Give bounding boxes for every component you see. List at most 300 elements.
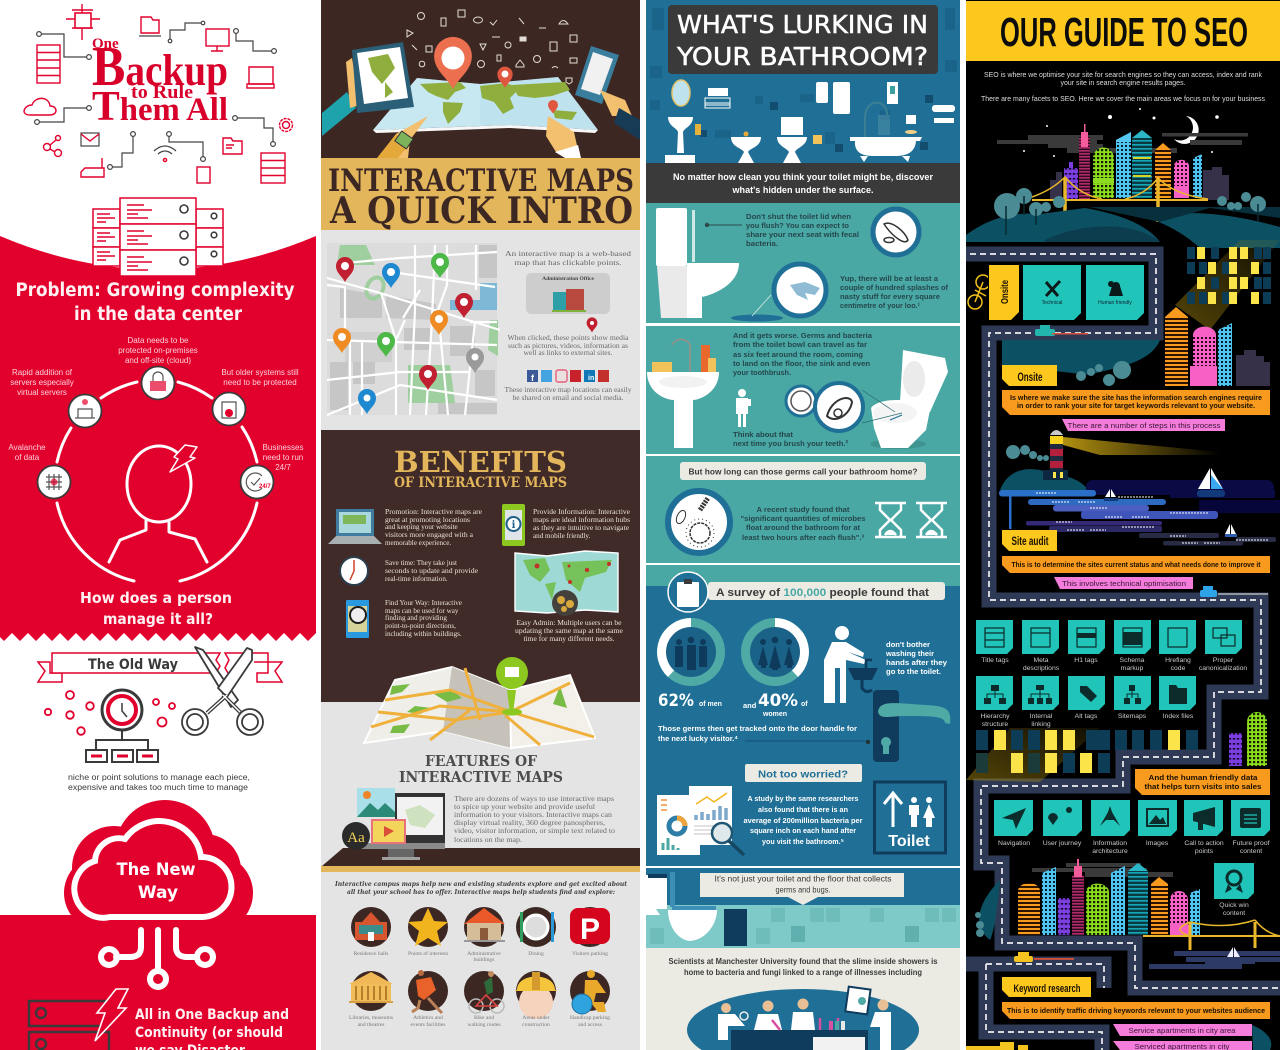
panel: What's lurking in your bathroom bbox=[646, 0, 960, 1050]
illustration: admin world map bbox=[515, 551, 618, 616]
benefits left text: maps can be used for way bbox=[385, 607, 459, 615]
illustration: basin with bottles bbox=[647, 339, 719, 448]
campus icon labels: Points of interests bbox=[408, 950, 448, 957]
benefits right text: maps are ideal information hubs bbox=[533, 516, 630, 524]
ring icons bbox=[38, 366, 274, 498]
researchers text: A study by the same researchers bbox=[748, 794, 858, 803]
label: technical optimisation: This involves technical optimisation bbox=[1062, 579, 1186, 588]
labels: human friendly: architecture bbox=[1092, 848, 1128, 855]
bar: keyword description: This is to identify traffic driving keywords relevant to your websites audience bbox=[1007, 1008, 1265, 1015]
study text bbox=[740, 505, 866, 542]
network of device icons bbox=[24, 4, 292, 183]
study text: least two hours after each flush".³ bbox=[742, 533, 864, 542]
icon: door handle bbox=[745, 690, 950, 762]
ring labels: need to be protected bbox=[223, 378, 297, 387]
server stack illustration bbox=[93, 198, 223, 276]
heading: growing complexity: in the data center bbox=[74, 304, 243, 325]
labels: technical row one: code bbox=[1171, 665, 1186, 672]
clicked points text: When clicked, these points show media bbox=[508, 334, 629, 342]
stat: 40% bbox=[743, 691, 808, 718]
hill: bottom right tree bbox=[1252, 1025, 1271, 1050]
campus icon labels: Administrative bbox=[467, 951, 501, 957]
title box: YOUR BATHROOM? bbox=[676, 42, 928, 71]
researchers text: square inch on each hand after bbox=[750, 826, 856, 835]
heading: the new way: Way bbox=[138, 883, 178, 903]
campus icon labels: Libraries, museums bbox=[349, 1015, 393, 1021]
caption: old way bbox=[68, 773, 250, 792]
ring labels: Businesses bbox=[263, 443, 303, 452]
brush teeth text: next time you brush your teeth.² bbox=[733, 439, 848, 448]
icon: person brushing bbox=[736, 389, 751, 427]
heading: features: INTERACTIVE MAPS bbox=[399, 768, 563, 786]
red panel: the new way bbox=[0, 800, 316, 1050]
text: all in one backup bbox=[135, 1007, 289, 1050]
heading: growing complexity bbox=[16, 280, 294, 325]
scientists text: home to bacteria and fungi linked to a range of illnesses including bbox=[684, 968, 922, 977]
researchers text: average of 200million bacteria per bbox=[744, 816, 862, 825]
clicked points text: such as pictures, videos, information as bbox=[508, 342, 628, 350]
popup: administration office bbox=[526, 273, 610, 314]
benefits right text: Provide Information: Interactive bbox=[533, 508, 630, 516]
easy admin text bbox=[515, 619, 623, 643]
germ travel text: to land on the floor, the sink and even bbox=[733, 359, 870, 368]
illustration: monitor and media: Aa bbox=[347, 830, 365, 846]
toilet lid text: share your next seat with fecal bbox=[746, 230, 859, 239]
night windows strip bbox=[966, 728, 1198, 782]
donut: 40% of women bbox=[741, 618, 809, 686]
callout: not just your toilet bbox=[700, 873, 904, 905]
icon: splash circle bbox=[774, 264, 826, 316]
toilet lid text bbox=[746, 212, 859, 248]
researchers text: you visit the bathroom.⁵ bbox=[762, 837, 844, 846]
ring labels: of data bbox=[15, 453, 40, 462]
heading: the new way bbox=[116, 860, 196, 903]
researchers text: also found that there is an bbox=[758, 805, 848, 814]
heading: the new way: The New bbox=[116, 860, 196, 880]
labels: technical row two: linking bbox=[1031, 721, 1051, 728]
sign: toilet: Toilet bbox=[888, 833, 930, 850]
campus icon labels: construction bbox=[522, 1022, 550, 1028]
title box: WHAT'S LURKING IN bbox=[677, 10, 928, 39]
benefits right text: and mobile friendly. bbox=[533, 532, 590, 540]
ribbon: the old way bbox=[38, 653, 282, 682]
labels: human friendly: points bbox=[1195, 848, 1214, 855]
door handle text bbox=[658, 724, 857, 743]
text: all in one backup: Continuity (or should bbox=[135, 1025, 283, 1041]
labels: human friendly: Information bbox=[1093, 840, 1127, 847]
germ travel text bbox=[733, 331, 873, 377]
study text: "significant quantities of microbes bbox=[740, 514, 866, 523]
hands text: hands after they bbox=[886, 658, 948, 667]
campus icon labels: walking routes bbox=[467, 1022, 501, 1028]
text: all in one backup: All in One Backup and bbox=[135, 1007, 289, 1023]
labels: human friendly: content bbox=[1240, 848, 1262, 855]
illustration: sea and sailboats bbox=[999, 468, 1280, 546]
title band: A QUICK INTRO bbox=[329, 190, 633, 232]
bar: onsite description: Is where we make sure the site has the information search engines require bbox=[1010, 395, 1262, 402]
illustration: monitor and media bbox=[342, 788, 445, 860]
benefits left text bbox=[385, 508, 482, 638]
icon: bicycle bbox=[968, 275, 990, 309]
skyline: upper city bbox=[1050, 124, 1229, 200]
ring icons: 24/7 bbox=[259, 484, 271, 490]
popup: administration office: Administration Office bbox=[542, 276, 594, 282]
icon: clock with network and costs bbox=[45, 690, 175, 762]
features text bbox=[454, 795, 615, 844]
ribbon: the old way: The Old Way bbox=[88, 657, 178, 673]
icon: person washing hands bbox=[824, 626, 878, 703]
ring labels: and off-site (cloud) bbox=[125, 356, 191, 365]
share text: These interactive map locations can easily bbox=[504, 386, 632, 394]
illustration: floor with toilet bbox=[646, 868, 960, 948]
icon: bacteria circle bbox=[873, 209, 919, 255]
label: onsite bbox=[1002, 365, 1057, 386]
skyline: onsite buildings and hill bbox=[1002, 307, 1270, 386]
intro text: SEO is where we optimise your site for search engines so they can access, index and rank bbox=[984, 72, 1262, 79]
night sky stars and moon bbox=[997, 108, 1248, 157]
label: technical optimisation bbox=[1054, 577, 1193, 589]
red panel: problem bbox=[0, 236, 316, 641]
labels: technical row two: Alt tags bbox=[1075, 713, 1098, 720]
splashes text: couple of hundred splashes of bbox=[840, 283, 948, 292]
benefits left text: visitors more engaged with a bbox=[385, 531, 474, 539]
illustration: fold-out road map with pin bbox=[364, 657, 595, 748]
illustration: tablets and hands bbox=[322, 42, 640, 158]
ring arcs and person outline bbox=[57, 382, 257, 581]
panel: Interactive Maps bbox=[321, 0, 640, 1050]
labels: technical row one: canonicalization bbox=[1199, 665, 1247, 672]
title: One Backup to Rule Them All bbox=[92, 36, 228, 130]
title: One Backup to Rule Them All: Backup bbox=[92, 36, 228, 98]
callout: not too worried bbox=[745, 764, 862, 782]
ring labels: Rapid addition of bbox=[12, 368, 73, 377]
cards: onsite steps: Technical bbox=[1042, 300, 1062, 306]
labels: human friendly: Navigation bbox=[998, 840, 1030, 847]
bar: human friendly data bbox=[1135, 769, 1270, 795]
icon: yellow truck bbox=[966, 1042, 1028, 1050]
campus intro text: all that your school has to offer. Interactive maps help students find and explore: bbox=[347, 888, 616, 896]
caption: old way: expensive and takes too much time to manage bbox=[68, 783, 249, 792]
label: service apartments in city area: Service apartments in city area bbox=[1128, 1026, 1237, 1035]
heading: growing complexity: Problem: Growing complexity bbox=[16, 280, 294, 301]
stat: 62%: 62% bbox=[658, 691, 694, 711]
icon: info phone: i bbox=[512, 520, 516, 531]
map description text bbox=[505, 249, 631, 267]
campus icon labels: Handicap parking bbox=[570, 1015, 610, 1021]
icon: blue car bbox=[1200, 586, 1268, 597]
label: keyword research bbox=[1002, 977, 1091, 997]
campus icon grid bbox=[349, 907, 610, 1019]
labels: technical row two: Sitemaps bbox=[1118, 713, 1147, 720]
campus icon labels: Areas under bbox=[522, 1015, 550, 1021]
icon: phone with magnifier bbox=[346, 600, 369, 638]
title band bbox=[966, 1, 1280, 61]
icon: laptop bbox=[328, 509, 382, 544]
labels: technical row two: Hierarchy bbox=[980, 713, 1010, 720]
benefits left text: Save time: They take just bbox=[385, 559, 457, 567]
campus icon labels: buildings bbox=[474, 957, 494, 963]
share text bbox=[504, 386, 632, 402]
scientists text bbox=[668, 957, 938, 977]
benefits left text: finding and providing bbox=[385, 614, 447, 622]
ring labels: 24/7 bbox=[275, 463, 291, 472]
panel: One Backup to Rule Them All bbox=[0, 4, 316, 1050]
cards: human friendly bbox=[994, 800, 1270, 836]
campus icon labels bbox=[349, 950, 610, 1028]
features text: information to your visitors. Interactive maps can bbox=[454, 811, 612, 819]
campus intro text bbox=[334, 880, 627, 896]
benefits right text: as they are intuitive to navigate bbox=[533, 524, 629, 532]
labels: technical row one bbox=[981, 657, 1247, 672]
label: site audit: Site audit bbox=[1012, 536, 1049, 548]
caption: old way: niche or point solutions to manage each piece, bbox=[68, 773, 250, 782]
stat: 62%: of men bbox=[699, 701, 722, 708]
icon: clock bbox=[340, 557, 368, 585]
card: quick win content: content bbox=[1223, 910, 1245, 917]
splashes text: centimetre of your loo.¹ bbox=[840, 301, 920, 310]
survey heading bbox=[668, 572, 945, 612]
bar: human friendly data: that helps turn visits into sales bbox=[1144, 782, 1262, 791]
campus icon labels: Visitors parking bbox=[572, 951, 608, 957]
icon: scissors bbox=[182, 647, 263, 735]
splashes text: nasty stuff for every square bbox=[840, 292, 941, 301]
social icons: in bbox=[588, 375, 594, 382]
splashes text: Yup, there will be at least a bbox=[840, 274, 939, 283]
bar: human friendly data: And the human friendly data bbox=[1148, 773, 1258, 782]
features text: There are dozens of ways to use interactive maps bbox=[454, 795, 614, 803]
title: One Backup to Rule Them All: Them All bbox=[92, 84, 228, 130]
stat: 40%: 40% bbox=[758, 691, 798, 711]
intro band: No matter how clean you think your toilet might be, discover bbox=[673, 172, 933, 182]
easy admin text: Easy Admin: Multiple users can be bbox=[516, 619, 622, 627]
door handle text: Those germs then get tracked onto the door handle for bbox=[658, 724, 857, 733]
label: onsite: Onsite bbox=[1018, 372, 1042, 384]
question: how does a person manage it all: manage it all? bbox=[103, 610, 213, 628]
hands text: go to the toilet. bbox=[886, 667, 941, 676]
brush teeth text: Think about that bbox=[733, 430, 793, 439]
features text: locations on the map. bbox=[454, 836, 522, 844]
title: One Backup to Rule Them All: One bbox=[92, 36, 119, 52]
campus icon labels: Bike and bbox=[474, 1015, 494, 1021]
map description text: An interactive map is a web-based bbox=[505, 249, 631, 258]
question: how does a person manage it all bbox=[80, 589, 232, 628]
bar: site audit description bbox=[1002, 556, 1270, 573]
illustration: lab scientists bbox=[687, 987, 919, 1050]
clicked points text bbox=[508, 334, 629, 357]
benefits left text: Promotion: Interactive maps are bbox=[385, 508, 482, 516]
lower bridge and water bbox=[1143, 920, 1280, 969]
label: number of steps: There are a number of steps in this process bbox=[1068, 421, 1221, 430]
ring labels: virtual servers bbox=[17, 388, 67, 397]
heading: features bbox=[399, 752, 563, 786]
icon: server and lightning bbox=[29, 989, 128, 1050]
cards: onsite steps: Onsite bbox=[1000, 280, 1011, 304]
callout: how long germs stay bbox=[680, 462, 926, 480]
labels: technical row two: Internal bbox=[1030, 713, 1053, 720]
card: quick win content: Quick win bbox=[1219, 902, 1249, 909]
map description text: map that has clickable points. bbox=[514, 258, 622, 267]
city map with pins bbox=[327, 243, 500, 415]
splashes text bbox=[840, 274, 948, 310]
cards: technical row two bbox=[976, 676, 1196, 710]
cards: technical row one bbox=[976, 620, 1242, 654]
campus icon labels: Athletics and bbox=[413, 1015, 443, 1021]
question: how does a person manage it all: How does a person bbox=[80, 589, 232, 607]
intro band: what's hidden under the surface. bbox=[731, 185, 874, 195]
ring labels: protected on-premises bbox=[118, 346, 198, 355]
skyline: small purple and green buildings bbox=[1229, 712, 1267, 766]
toilet lid text: you flush? You can expect to bbox=[746, 221, 849, 230]
illustration: world map with pins bbox=[373, 37, 598, 133]
illustration: toilet side view bbox=[656, 208, 783, 322]
icon: info phone bbox=[502, 504, 525, 546]
title band: INTERACTIVE MAPS bbox=[328, 163, 634, 199]
illustration: bathroom fixtures bbox=[665, 80, 955, 163]
tile texture bbox=[650, 8, 957, 152]
cards: onsite steps bbox=[988, 262, 1147, 324]
ring labels: need to run bbox=[263, 453, 303, 462]
icon: hourglasses bbox=[875, 503, 947, 537]
benefits left text: point-to-point directions, bbox=[385, 622, 456, 630]
labels: technical row one: Meta bbox=[1033, 657, 1049, 664]
hands text bbox=[885, 640, 948, 676]
illustration: reports and magnifier bbox=[657, 786, 744, 855]
study text: A recent study found that bbox=[756, 505, 850, 514]
benefits left text: real-time information. bbox=[385, 575, 448, 583]
labels: technical row one: descriptions bbox=[1023, 665, 1060, 672]
title box bbox=[668, 5, 938, 74]
labels: technical row two bbox=[980, 713, 1194, 728]
icon: yellow car bbox=[1014, 952, 1074, 962]
sign: toilet bbox=[874, 782, 946, 853]
germ travel text: your toothbrush. bbox=[733, 368, 791, 377]
icon: microbes circle bbox=[668, 491, 730, 553]
icon: germ circles bbox=[786, 383, 863, 431]
band bbox=[321, 848, 640, 872]
labels: human friendly: User journey bbox=[1043, 840, 1082, 847]
bridge bbox=[1032, 177, 1208, 222]
ring labels: servers especially bbox=[10, 378, 74, 387]
benefits left text: including within buildings. bbox=[385, 630, 462, 638]
scientists text: Scientists at Manchester University found that the slime inside showers is bbox=[668, 957, 938, 966]
benefits right text bbox=[533, 508, 630, 540]
ring labels bbox=[8, 336, 303, 472]
intro band bbox=[646, 163, 960, 203]
benefits left text: and keeping your website bbox=[385, 523, 458, 531]
title band bbox=[321, 158, 640, 232]
callout: how long germs stay: But how long can those germs call your bathroom home? bbox=[688, 466, 918, 476]
bar: onsite description: in order to rank your site for target keywords relevant to your website. bbox=[1017, 403, 1255, 410]
hands text: washing their bbox=[885, 649, 934, 658]
germ travel text: from the toilet bowl can travel as far bbox=[733, 340, 867, 349]
germ travel text: And it gets worse. Germs and bacteria bbox=[733, 331, 873, 340]
hands text: don't bother bbox=[886, 640, 930, 649]
skyline: lower city bbox=[975, 859, 1200, 940]
features text: video, visitor information, or simple text related to bbox=[454, 827, 615, 835]
share text: be shared on email and social media. bbox=[512, 394, 624, 402]
researchers text bbox=[744, 794, 862, 846]
campus icon labels: Dining bbox=[528, 951, 544, 957]
ring labels: Data needs to be bbox=[128, 336, 189, 345]
toilet lid text: Don't shut the toilet lid when bbox=[746, 212, 851, 221]
donut: 62% of men bbox=[657, 618, 725, 686]
title: One Backup to Rule Them All: to Rule bbox=[131, 82, 193, 103]
campus icon labels: Residence halls bbox=[354, 951, 388, 957]
labels: technical row two: Index files bbox=[1163, 713, 1194, 720]
bar: onsite description bbox=[1002, 390, 1270, 415]
stat: 62% bbox=[658, 691, 722, 711]
heading: benefits: OF INTERACTIVE MAPS bbox=[394, 475, 567, 491]
germ travel text: as six feet around the room, coming bbox=[733, 350, 863, 359]
card: quick win content bbox=[1214, 863, 1254, 917]
benefits left text: great at promoting locations bbox=[385, 516, 470, 524]
labels: human friendly bbox=[998, 840, 1270, 855]
label: site audit bbox=[1002, 530, 1057, 551]
door handle text: the next lucky visitor.⁴ bbox=[658, 734, 738, 743]
intro text: There are many facets to SEO. Here we cover the main areas we focus on for your business bbox=[981, 96, 1265, 103]
floating web icons bbox=[407, 10, 577, 84]
labels: technical row two: structure bbox=[982, 721, 1008, 728]
labels: human friendly: Future proof bbox=[1232, 840, 1270, 847]
labels: technical row one: Title tags bbox=[981, 657, 1009, 664]
social icons bbox=[527, 370, 609, 383]
campus icon labels: and theatres bbox=[358, 1022, 384, 1028]
labels: technical row one: Hreflang bbox=[1165, 657, 1191, 664]
labels: technical row one: Schema bbox=[1120, 657, 1145, 664]
hills and trees bbox=[966, 188, 1280, 248]
easy admin text: updating the same map at the same bbox=[515, 627, 623, 635]
benefits left text: memorable experience. bbox=[385, 539, 451, 547]
callout: not just your toilet: germs and bugs. bbox=[776, 886, 830, 894]
intro text bbox=[981, 72, 1265, 103]
bar: keyword description bbox=[1002, 1002, 1270, 1019]
illustration: toilet front view bbox=[862, 350, 948, 449]
road network bbox=[966, 254, 1280, 1050]
study text: float around the bathroom for at bbox=[746, 523, 860, 532]
benefits left text: seconds to update and provide bbox=[385, 567, 478, 575]
labels: human friendly: Call to action bbox=[1184, 840, 1224, 847]
campus icon labels: events facilities bbox=[411, 1021, 445, 1028]
callout: not too worried: Not too worried? bbox=[758, 768, 848, 780]
bar: site audit description: This is to determine the sites current status and what needs done to improve it bbox=[1012, 562, 1261, 569]
night building windows bbox=[1175, 240, 1280, 330]
easy admin text: time for many different needs. bbox=[524, 635, 615, 643]
labels: human friendly: Images bbox=[1146, 840, 1169, 847]
label: serviced apartments in city bbox=[1113, 1041, 1252, 1050]
heading: benefits: BENEFITS bbox=[394, 445, 567, 479]
illustration: lighthouse and beam bbox=[1000, 430, 1220, 492]
label: service apartments in city area bbox=[1113, 1024, 1252, 1036]
brush teeth text bbox=[733, 430, 848, 448]
ring labels: Avalanche bbox=[8, 443, 46, 452]
panel: Our guide to SEO bbox=[966, 0, 1280, 1050]
campus intro text: Interactive campus maps help new and existing students explore and get excited about bbox=[334, 880, 627, 888]
labels: technical row one: H1 tags bbox=[1074, 657, 1098, 664]
heading: features: FEATURES OF bbox=[425, 752, 537, 770]
icon: circuit connectors bbox=[101, 930, 213, 987]
icon: teal car bbox=[1035, 325, 1088, 336]
icon: small pin bbox=[587, 317, 597, 332]
toilet lid text: bacteria. bbox=[746, 239, 778, 248]
social icons: f bbox=[531, 373, 535, 383]
survey heading: A survey of 100,000 people found that bbox=[716, 587, 929, 599]
benefits left text: Find Your Way: Interactive bbox=[385, 599, 462, 607]
features text: to spice up your website and provide useful bbox=[454, 803, 595, 811]
stat: 40%: women bbox=[762, 711, 787, 718]
ring labels: But older systems still bbox=[221, 368, 299, 377]
labels: technical row one: Proper bbox=[1213, 657, 1234, 664]
callout: not just your toilet: It's not just your toilet and the floor that collects bbox=[714, 874, 892, 884]
